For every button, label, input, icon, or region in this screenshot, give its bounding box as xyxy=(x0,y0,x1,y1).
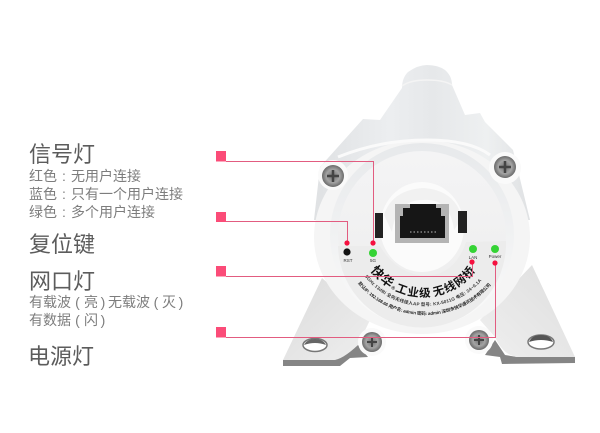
heading: reset button: 复位键 xyxy=(29,232,95,257)
text: data state: ( xyxy=(75,312,80,328)
text: red state: : xyxy=(62,168,66,184)
ethernet port xyxy=(375,182,467,272)
text: carrier state: ) xyxy=(101,294,105,310)
indicator LEDs and reset button: Power xyxy=(489,254,502,259)
text: data state: ) xyxy=(101,312,105,328)
device label text: 默认IP: 192.168.66 用户名: admin 密码: admin 深圳市快华通讯技术有限公司 xyxy=(358,281,491,316)
indicator LEDs and reset button: RST xyxy=(344,258,353,263)
indicator LEDs and reset button: LAN xyxy=(469,255,477,260)
device label text: 5GHz 13dBi 全向无线接入AP 型号: KX-5011G 电压: 24~0.1A xyxy=(365,274,482,306)
indicator LEDs and reset button xyxy=(343,245,502,263)
heading: network port light: 网口灯 xyxy=(29,269,95,294)
screws xyxy=(318,152,521,356)
heading: power light: 电源灯 xyxy=(28,344,94,369)
text: green state: 绿色 多个用户连接 xyxy=(29,204,155,220)
heading: signal light: 信号灯 xyxy=(29,142,95,167)
label plate xyxy=(338,241,506,328)
callout markers xyxy=(216,151,498,338)
text: red state: 红色 无用户连接 xyxy=(29,168,141,184)
antenna housing xyxy=(314,65,530,334)
callout lines xyxy=(226,162,496,338)
text: carrier state: ) xyxy=(179,294,183,310)
text: green state: : xyxy=(62,204,66,220)
text: data state: 有数据 闪 xyxy=(29,312,98,328)
text: blue state: : xyxy=(62,186,66,202)
indicator LEDs and reset button: 5G xyxy=(370,258,376,263)
device label text xyxy=(358,264,491,316)
text: carrier state: ( xyxy=(75,294,80,310)
device label text: 快华®工业级 无线网桥 xyxy=(370,264,475,298)
text: carrier state: 有载波 亮 无载波 灭 xyxy=(29,294,176,310)
mounting base xyxy=(283,265,575,366)
text: blue state: 蓝色 只有一个用户连接 xyxy=(29,186,183,202)
text: carrier state: ( xyxy=(154,294,158,310)
